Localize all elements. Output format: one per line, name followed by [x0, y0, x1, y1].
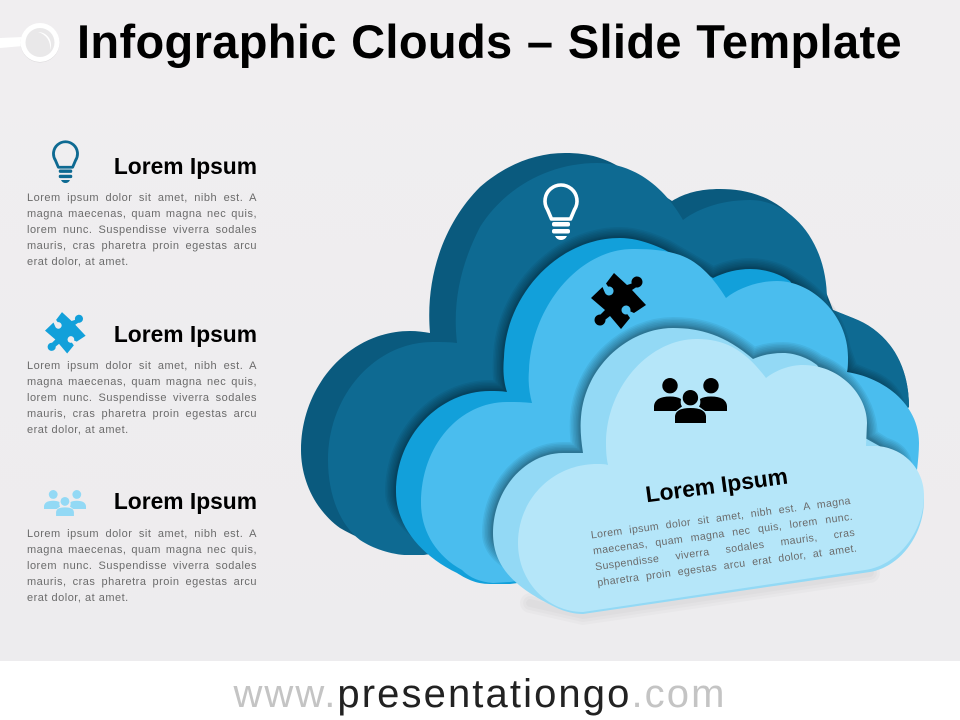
body text: magna maecenas, quam magna nec quis,	[27, 376, 257, 388]
body text	[27, 360, 257, 436]
panel: item 1	[27, 140, 257, 268]
body text: magna maecenas, quam magna nec quis,	[27, 544, 257, 556]
body text: lorem nunc. Suspendisse viverra sodales	[27, 224, 257, 236]
body text: Lorem ipsum dolor sit amet, nibh est. A	[27, 192, 257, 204]
icon: light bulb white	[545, 185, 577, 240]
panel: item 2	[27, 312, 257, 436]
body text: magna maecenas, quam magna nec quis,	[27, 208, 257, 220]
title: Infographic Clouds – Slide Template	[77, 15, 902, 68]
body text: mauris, cras pharetra proin egestas arcu	[27, 408, 257, 420]
cloud 2: medium blue	[396, 238, 919, 584]
body text: mauris, cras pharetra proin egestas arcu	[27, 576, 257, 588]
cloud caption text: maecenas, quam magna nec quis, lorem nunc.	[592, 511, 854, 557]
icon: people group	[44, 490, 86, 516]
cloud caption text	[590, 495, 858, 589]
body text	[27, 528, 257, 604]
cloud 3: light blue	[493, 328, 924, 614]
panel: item 3	[27, 488, 257, 604]
body text: lorem nunc. Suspendisse viverra sodales	[27, 392, 257, 404]
body text: lorem nunc. Suspendisse viverra sodales	[27, 560, 257, 572]
icon: people group black	[654, 378, 727, 423]
heading: Lorem Ipsum	[114, 488, 257, 514]
heading: Lorem Ipsum	[114, 321, 257, 347]
title marker: ring with handle	[0, 23, 60, 62]
body text: erat dolor, at amet.	[27, 424, 129, 436]
body text: erat dolor, at amet.	[27, 592, 129, 604]
body text: Lorem ipsum dolor sit amet, nibh est. A	[27, 360, 257, 372]
body text: Lorem ipsum dolor sit amet, nibh est. A	[27, 528, 257, 540]
body text: erat dolor, at amet.	[27, 256, 129, 268]
icon: puzzle piece black	[591, 273, 646, 329]
cloud 1: dark blue	[301, 153, 909, 555]
heading: Lorem Ipsum	[114, 153, 257, 179]
body text	[27, 192, 257, 268]
cloud caption text: Lorem ipsum dolor sit amet, nibh est. A magna	[590, 495, 851, 541]
footer website address: www.presentationgo.com	[233, 672, 727, 716]
icon: puzzle piece	[45, 312, 86, 354]
icon: light bulb	[52, 140, 79, 183]
cloud caption text: pharetra proin egestas arcu erat dolor, at amet.	[597, 543, 858, 589]
body text: mauris, cras pharetra proin egestas arcu	[27, 240, 257, 252]
cloud caption text: Suspendisse viverra sodales mauris, cras	[594, 527, 856, 573]
cloud caption heading: Lorem Ipsum	[644, 463, 789, 507]
